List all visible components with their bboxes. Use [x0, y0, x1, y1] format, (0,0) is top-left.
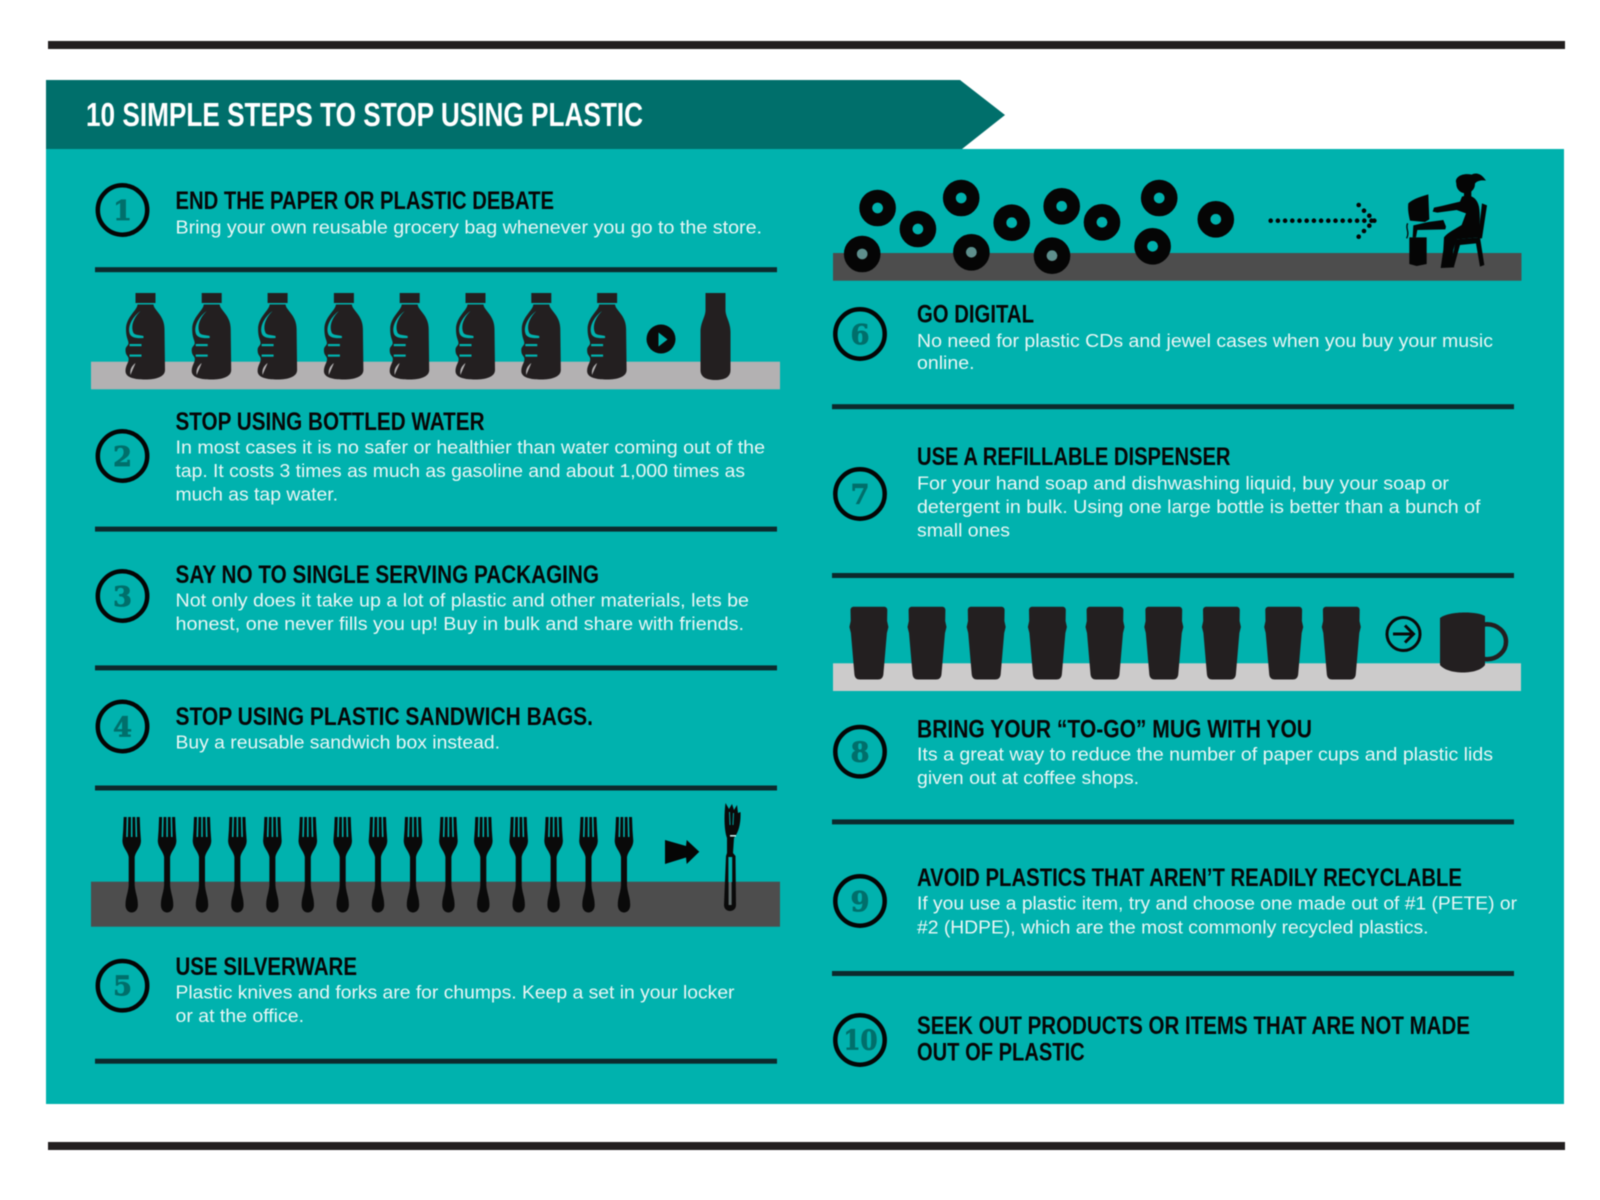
row of plastic bottles — [126, 293, 627, 380]
heading 3: SAY NO TO SINGLE SERVING PACKAGING — [176, 561, 599, 589]
illustration: plastic bottles to reusable bottle — [91, 293, 780, 389]
text 4: Buy a reusable sandwich box instead. — [176, 733, 500, 753]
step 6 — [835, 301, 1493, 373]
CD centre holes — [857, 193, 1221, 261]
step 1 — [98, 185, 762, 238]
text 9 — [917, 894, 1517, 937]
badge 7: 7 — [851, 480, 869, 511]
heading 2: STOP USING BOTTLED WATER — [176, 408, 484, 436]
illustration: CDs to digital music — [833, 174, 1522, 281]
dark shelf — [91, 882, 780, 927]
title: 10 SIMPLE STEPS TO STOP USING PLASTIC — [86, 96, 643, 133]
badge 2 — [98, 431, 147, 481]
badge 5 — [98, 961, 147, 1010]
text 6: online. — [917, 353, 974, 373]
badge 9: 9 — [851, 887, 869, 918]
banner arrow shape — [46, 80, 1005, 149]
silver fork — [724, 803, 741, 911]
text 2 — [176, 438, 765, 505]
step 8 — [835, 715, 1493, 788]
text 5 — [176, 983, 734, 1026]
person at computer silhouette — [1407, 174, 1487, 268]
heading 5: USE SILVERWARE — [176, 953, 357, 981]
badge 9 — [835, 876, 885, 926]
heading 10: OUT OF PLASTIC — [917, 1039, 1085, 1067]
step 3 — [98, 561, 749, 634]
heading 6: GO DIGITAL — [917, 301, 1034, 329]
heading 1: END THE PAPER OR PLASTIC DEBATE — [176, 187, 554, 215]
text 6 — [917, 331, 1493, 373]
dark shelf — [833, 253, 1522, 281]
double arrow — [665, 840, 699, 864]
badge 6 — [835, 309, 885, 359]
text 2: much as tap water. — [176, 485, 338, 505]
arrow icon — [1387, 618, 1420, 650]
badge 8: 8 — [851, 738, 869, 769]
badge 1 — [98, 185, 147, 235]
text 3 — [176, 591, 749, 634]
badge 3: 3 — [113, 582, 132, 613]
text 3: honest, one never fills you up! Buy in bulk and share with friends. — [176, 614, 744, 634]
text 8: given out at coffee shops. — [917, 768, 1139, 788]
badge 5: 5 — [113, 972, 132, 1003]
mug — [1440, 612, 1506, 672]
badge 6: 6 — [851, 320, 869, 351]
row of cups — [849, 607, 1361, 680]
step 9 — [835, 864, 1517, 937]
step 2 — [98, 408, 765, 505]
text 7: For your hand soap and dishwashing liquid, buy your soap or — [917, 473, 1449, 493]
text 7: small ones — [917, 520, 1010, 540]
grey shelf — [91, 362, 780, 389]
step 4 — [98, 702, 593, 753]
step 10 — [835, 1012, 1470, 1067]
heading 10: SEEK OUT PRODUCTS OR ITEMS THAT ARE NOT MADE — [917, 1012, 1470, 1040]
dotted arrow — [1271, 203, 1377, 239]
heading 10 — [917, 1012, 1470, 1067]
text 8: Its a great way to reduce the number of paper cups and plastic lids — [917, 745, 1493, 765]
text 2: tap. It costs 3 times as much as gasoline and about 1,000 times as — [176, 461, 745, 481]
bottom rule — [48, 1142, 1565, 1150]
row of plastic forks — [122, 815, 633, 912]
text 8 — [917, 745, 1493, 788]
badge 10 — [835, 1015, 885, 1065]
main teal panel — [46, 149, 1564, 1104]
text 2: In most cases it is no safer or healthier than water coming out of the — [176, 438, 765, 458]
step 5 — [98, 953, 735, 1026]
text 3: Not only does it take up a lot of plastic and other materials, lets be — [176, 591, 749, 611]
badge 1: 1 — [113, 196, 132, 227]
badge 3 — [98, 571, 147, 621]
text 6: No need for plastic CDs and jewel cases when you buy your music — [917, 331, 1493, 351]
badge 10: 10 — [844, 1026, 878, 1056]
top rule — [48, 41, 1565, 49]
badge 7 — [835, 469, 885, 519]
reusable bottle — [700, 293, 730, 380]
badge 4: 4 — [113, 712, 132, 744]
heading 9: AVOID PLASTICS THAT AREN’T READILY RECYCLABLE — [917, 864, 1462, 892]
scattered CDs — [850, 186, 1228, 268]
illustration: paper cups to reusable mug — [833, 607, 1521, 691]
text 9: #2 (HDPE), which are the most commonly recycled plastics. — [917, 917, 1428, 937]
badge 4 — [98, 702, 147, 751]
badge 2: 2 — [113, 442, 132, 473]
text 1: Bring your own reusable grocery bag whenever you go to the store. — [176, 218, 762, 238]
text 7 — [917, 473, 1482, 540]
text 7: detergent in bulk. Using one large bottle is better than a bunch of — [917, 497, 1482, 517]
arrow icon — [646, 324, 676, 354]
heading 4: STOP USING PLASTIC SANDWICH BAGS. — [176, 703, 593, 731]
badge 8 — [835, 727, 885, 776]
text 5: Plastic knives and forks are for chumps. Keep a set in your locker — [176, 983, 734, 1003]
step 7 — [835, 443, 1482, 540]
text 5: or at the office. — [176, 1006, 304, 1026]
heading 7: USE A REFILLABLE DISPENSER — [917, 443, 1230, 471]
heading 8: BRING YOUR “TO-GO” MUG WITH YOU — [917, 715, 1312, 743]
illustration: plastic forks to silverware — [91, 803, 780, 927]
header banner — [46, 80, 1005, 149]
text 9: If you use a plastic item, try and choose one made out of #1 (PETE) or — [917, 894, 1517, 914]
light shelf — [833, 663, 1521, 691]
